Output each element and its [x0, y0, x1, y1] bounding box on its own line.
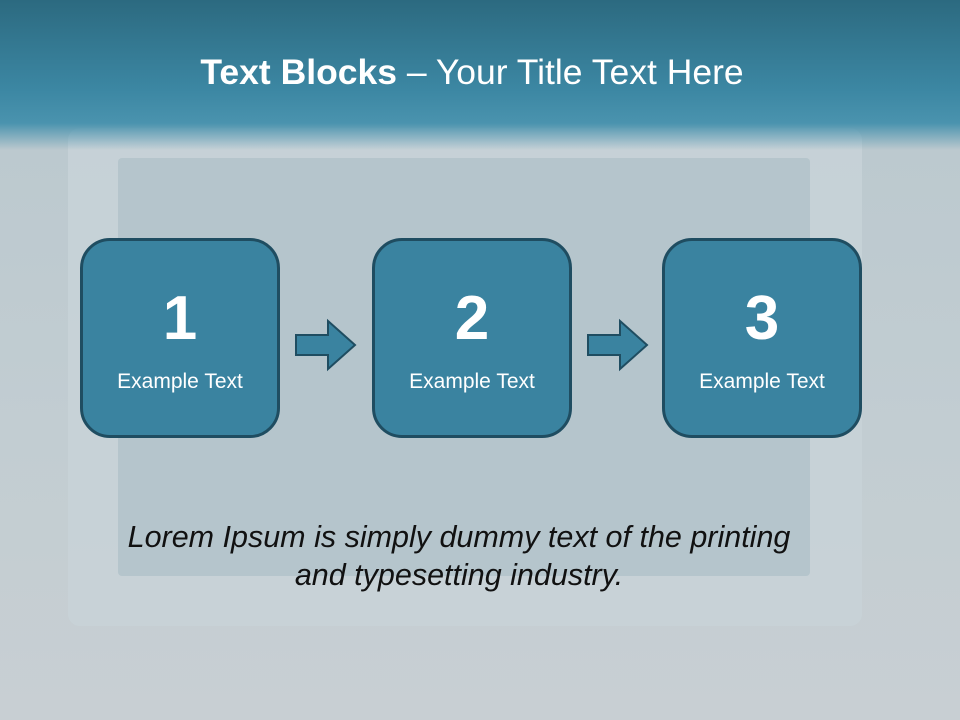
- box 2: 2: [455, 284, 489, 353]
- box 1: 1: [163, 284, 197, 353]
- box 1: [80, 238, 280, 438]
- body text: [128, 520, 790, 592]
- box 2: Example Text: [409, 370, 535, 393]
- tablet background: [68, 128, 862, 626]
- arrow 1: [295, 318, 356, 372]
- arrow 2: [587, 318, 648, 372]
- body text: and typesetting industry.: [295, 558, 623, 592]
- tablet screen: [118, 158, 810, 576]
- box 3: Example Text: [699, 370, 825, 393]
- box 2: [372, 238, 572, 438]
- box 3: 3: [745, 284, 779, 353]
- title: Text Blocks – Your Title Text Here: [200, 52, 744, 92]
- header bar: [0, 0, 960, 150]
- box 3: [662, 238, 862, 438]
- body text: Lorem Ipsum is simply dummy text of the printing: [128, 520, 790, 554]
- box 1: Example Text: [117, 370, 243, 393]
